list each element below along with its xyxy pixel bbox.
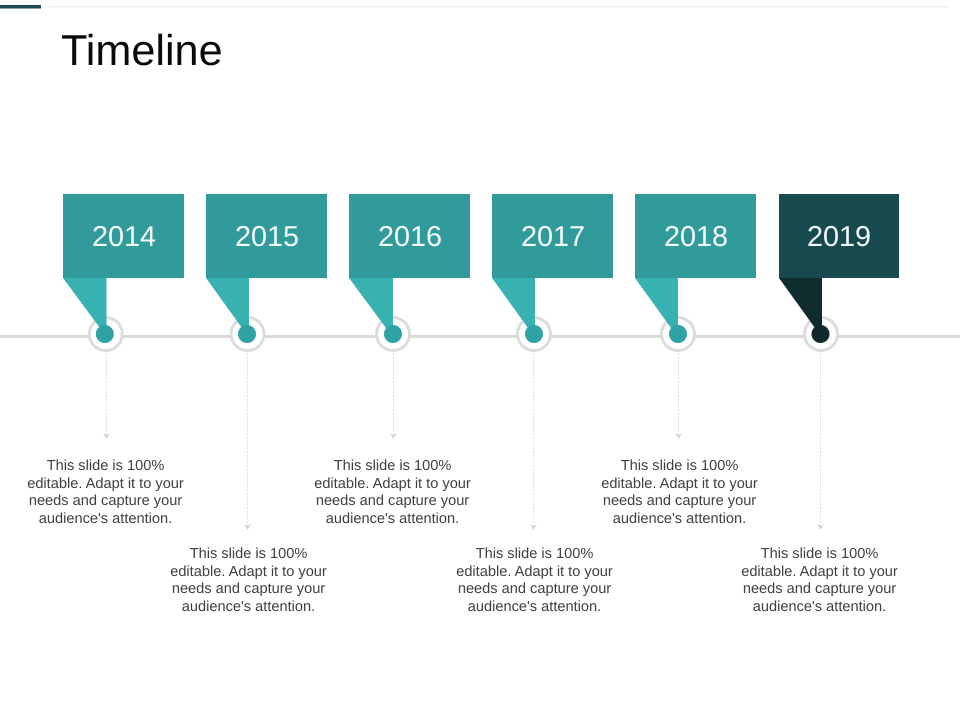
timeline axis: [0, 335, 960, 338]
milestone 2014: [27, 194, 184, 527]
marker 2018: [635, 278, 694, 350]
year box 2018: 2018: [664, 221, 728, 253]
arrow 2017: [530, 353, 537, 530]
text 2017: needs and capture your: [458, 581, 611, 597]
text 2019: audience's attention.: [753, 599, 886, 615]
text 2017: editable. Adapt it to your: [456, 564, 613, 580]
year box 2016: [349, 194, 470, 278]
arrow 2016: [390, 353, 397, 439]
text 2014: audience's attention.: [39, 511, 172, 527]
arrow 2014: [103, 353, 110, 439]
title: Timeline: [61, 27, 223, 75]
milestone 2018: [601, 194, 758, 527]
text 2019: This slide is 100%: [761, 546, 878, 562]
year box 2014: [63, 194, 184, 278]
text 2015: needs and capture your: [172, 581, 325, 597]
text 2015: audience's attention.: [182, 599, 315, 615]
text 2014: needs and capture your: [29, 493, 182, 509]
milestone 2019: [741, 194, 899, 615]
year box 2016: 2016: [378, 221, 442, 253]
marker 2017: [492, 278, 550, 350]
arrow 2018: [675, 353, 682, 439]
text 2016: editable. Adapt it to your: [314, 476, 471, 492]
text 2018: This slide is 100%: [621, 458, 738, 474]
arrow 2019: [817, 353, 824, 530]
text 2019: needs and capture your: [743, 581, 896, 597]
text 2016: This slide is 100%: [334, 458, 451, 474]
text 2016: audience's attention.: [326, 511, 459, 527]
top accent bar: [0, 5, 41, 8]
text 2017: audience's attention.: [468, 599, 601, 615]
year box 2017: [492, 194, 613, 278]
arrow 2015: [244, 353, 251, 530]
text 2015: This slide is 100%: [190, 546, 307, 562]
year box 2015: 2015: [235, 221, 299, 253]
text 2016: needs and capture your: [316, 493, 469, 509]
milestone 2017: [456, 194, 613, 615]
marker 2015: [206, 278, 264, 350]
year box 2019: [779, 194, 899, 278]
milestone 2015: [170, 194, 327, 615]
text 2014: editable. Adapt it to your: [27, 476, 184, 492]
year box 2017: 2017: [521, 221, 585, 253]
year box 2019: 2019: [807, 221, 871, 253]
year box 2018: [635, 194, 756, 278]
year box 2015: [206, 194, 327, 278]
text 2015: editable. Adapt it to your: [170, 564, 327, 580]
text 2018: needs and capture your: [603, 493, 756, 509]
marker 2019: [779, 278, 838, 350]
text 2019: editable. Adapt it to your: [741, 564, 898, 580]
marker 2014: [63, 278, 122, 350]
text 2018: editable. Adapt it to your: [601, 476, 758, 492]
milestone 2016: [314, 194, 471, 527]
text 2018: audience's attention.: [613, 511, 746, 527]
marker 2016: [349, 278, 410, 350]
text 2017: This slide is 100%: [476, 546, 593, 562]
text 2014: This slide is 100%: [47, 458, 164, 474]
year box 2014: 2014: [92, 221, 156, 253]
